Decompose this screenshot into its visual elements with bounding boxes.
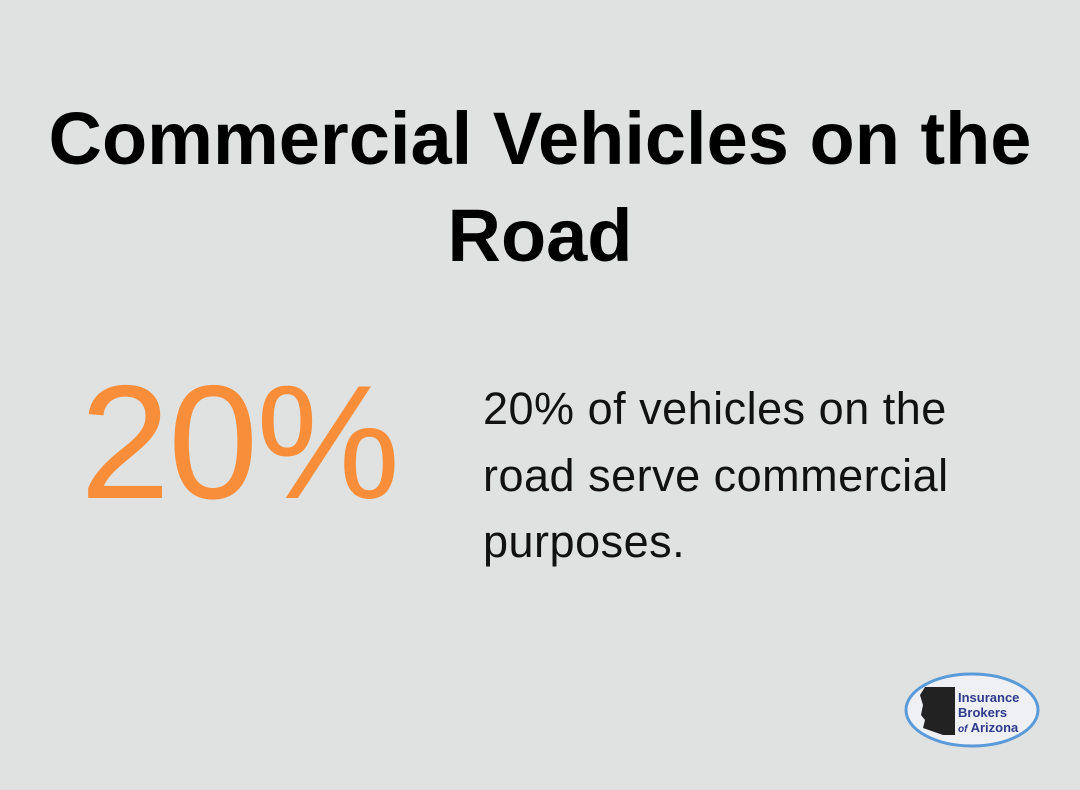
big stat: 20%: 20% [80, 352, 398, 533]
description text: 20% of vehicles on the [483, 383, 947, 434]
title: Road [448, 194, 632, 277]
logo: Insurance Brokers of Arizona: Brokers [958, 705, 1007, 720]
description text [483, 383, 949, 567]
logo: Insurance Brokers of Arizona [904, 672, 1040, 748]
logo: Insurance Brokers of Arizona: Insurance [958, 690, 1019, 705]
title: Commercial Vehicles on the [49, 97, 1031, 180]
description text: road serve commercial [483, 450, 949, 500]
logo: Insurance Brokers of Arizona: of Arizona [958, 720, 1019, 735]
title [49, 97, 1031, 277]
description text: purposes. [483, 516, 685, 567]
